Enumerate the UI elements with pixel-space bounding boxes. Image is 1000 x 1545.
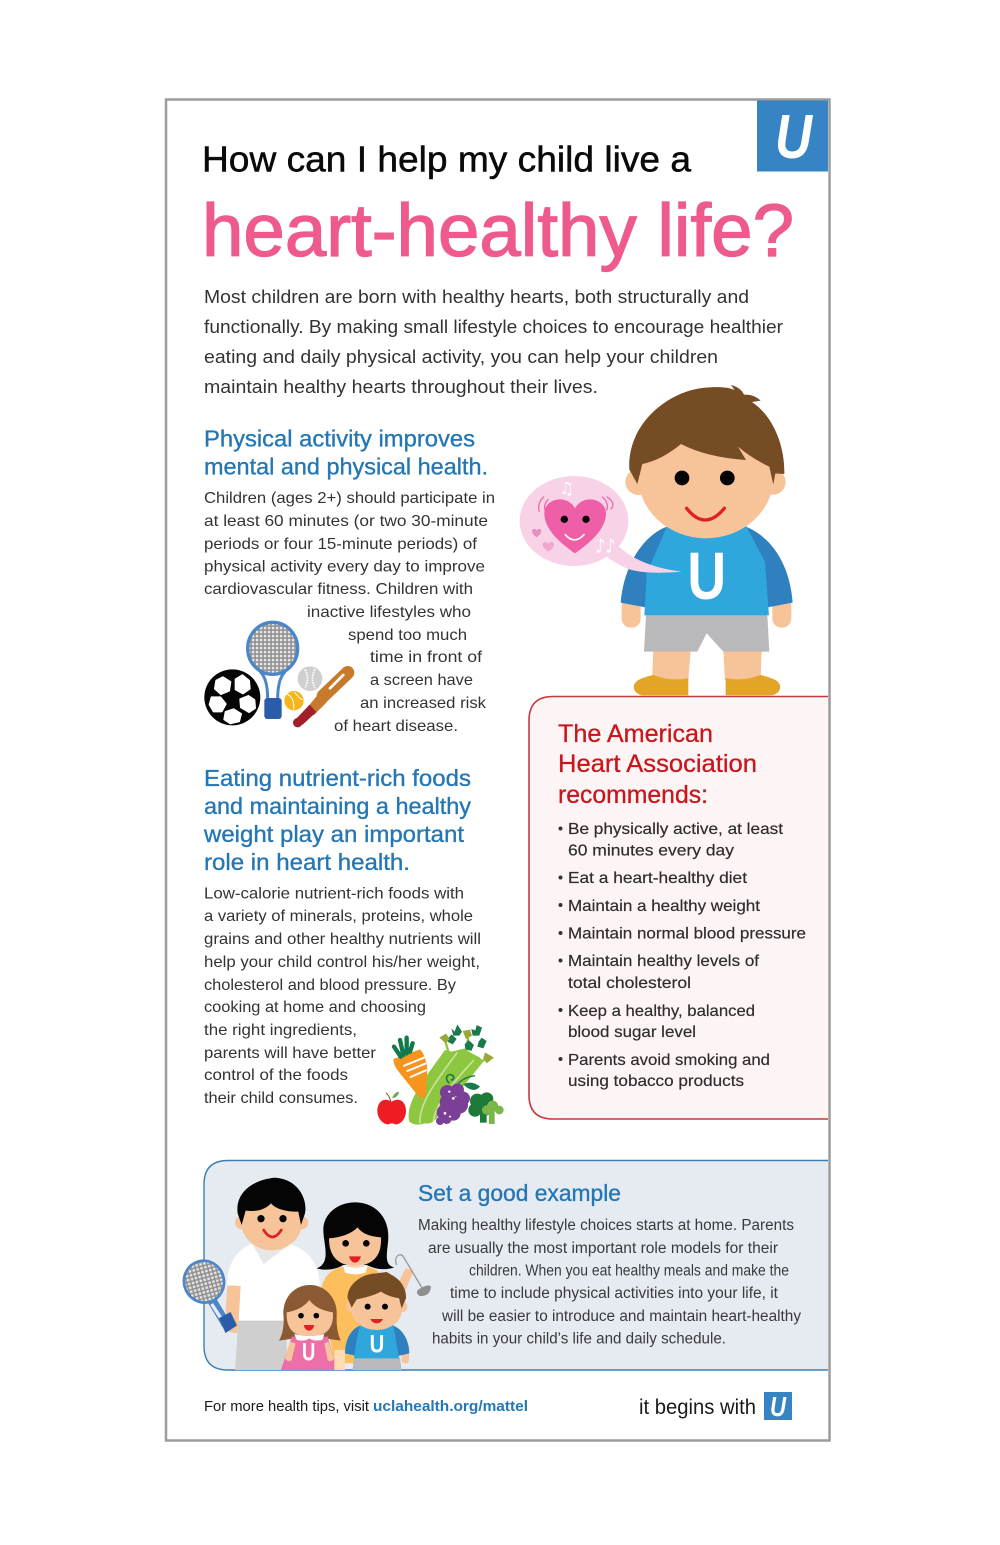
text block: set a good example: time to include physical activities into your life, it <box>450 1285 779 1302</box>
icon: music notes: ♪♪ <box>595 535 615 558</box>
text block: set a good example: habits in your child’s life and daily schedule. <box>432 1330 726 1348</box>
heading: physical activity: Physical activity improves <box>204 426 475 452</box>
text block: nutrient-rich foods: their child consumes. <box>204 1090 358 1107</box>
heading: nutrient-rich foods: and maintaining a healthy <box>204 793 471 819</box>
text block: physical activity: spend too much <box>348 627 467 644</box>
text block: set a good example: are usually the most important role models for their <box>428 1240 778 1257</box>
list: recommendations: Maintain a healthy weight <box>568 898 761 915</box>
list: recommendations: using tobacco products <box>568 1073 744 1090</box>
son: U <box>370 1331 384 1359</box>
list: recommendations: Eat a heart-healthy diet <box>568 870 748 887</box>
list: recommendations: total cholesterol <box>568 975 691 992</box>
heading: recommendations: The American <box>558 720 713 748</box>
speech bubble with heart <box>520 476 682 573</box>
mother <box>317 1202 431 1363</box>
panel: set a good example <box>204 1160 828 1370</box>
text block: nutrient-rich foods: the right ingredients, <box>204 1022 357 1039</box>
text block: physical activity: inactive lifestyles who <box>307 604 471 621</box>
list: recommendations: Maintain normal blood pressure <box>568 926 806 942</box>
footer tagline logo <box>639 1391 792 1422</box>
icon: fruits and vegetables <box>377 1024 504 1125</box>
illustration: boy with heart speech bubble <box>520 385 793 695</box>
heading: nutrient-rich foods: role in heart health. <box>204 849 410 875</box>
icon: broccoli <box>468 1092 504 1124</box>
title <box>202 138 794 272</box>
heading: set a good example: Set a good example <box>418 1180 621 1206</box>
icon: small hearts <box>532 529 554 552</box>
footer tagline logo: U <box>770 1391 787 1422</box>
boy: hands <box>622 597 791 628</box>
daughter <box>279 1285 341 1372</box>
text block: nutrient-rich foods: cooking at home and choosing <box>204 999 426 1016</box>
icon: music notes: ♫ <box>559 479 574 498</box>
icon: soccer ball <box>204 669 260 725</box>
text block: physical activity <box>204 490 495 735</box>
icon: tennis ball <box>284 691 304 710</box>
heading: nutrient-rich foods: weight play an important <box>203 821 465 847</box>
icon: apple <box>377 1092 406 1124</box>
boy: shorts <box>644 615 769 652</box>
intro paragraph: maintain healthy hearts throughout their lives. <box>204 376 598 397</box>
text block: set a good example: will be easier to introduce and maintain heart-healthy <box>441 1308 801 1325</box>
tennis racket <box>179 1256 236 1332</box>
icon: smiling heart <box>539 497 613 553</box>
text block: nutrient-rich foods: cholesterol and blood pressure. By <box>204 977 456 994</box>
heading: nutrient-rich foods <box>203 765 471 875</box>
title: heart-healthy life? <box>202 189 794 272</box>
icon: sports equipment <box>204 622 348 727</box>
text block: physical activity: Children (ages 2+) should participate in <box>204 490 495 507</box>
list: recommendations: blood sugar level <box>568 1024 696 1041</box>
list: recommendations: Keep a healthy, balanced <box>568 1003 755 1020</box>
text block: physical activity: of heart disease. <box>334 718 458 735</box>
text block: set a good example <box>418 1217 801 1348</box>
panel: American Heart Association recommendations <box>529 696 828 1119</box>
intro paragraph: eating and daily physical activity, you can help your children <box>204 346 718 367</box>
text block: nutrient-rich foods: control of the foods <box>204 1067 348 1084</box>
footer tagline logo: it begins with <box>639 1395 756 1419</box>
list: recommendations: Be physically active, at least <box>568 821 784 838</box>
icon: grapes <box>436 1075 480 1125</box>
text block: nutrient-rich foods: a variety of minerals, proteins, whole <box>204 908 473 925</box>
son <box>334 1272 409 1372</box>
heading: recommendations: recommends: <box>558 781 708 809</box>
page frame <box>166 100 830 1440</box>
icon: music notes <box>559 479 615 558</box>
footer link text: uclahealth.org/mattel <box>373 1399 528 1415</box>
icon: tennis racket <box>248 622 298 719</box>
heading: physical activity: mental and physical health. <box>204 454 488 480</box>
text block: physical activity: at least 60 minutes (or two 30-minute <box>204 513 488 530</box>
list: recommendations <box>558 821 806 1090</box>
father <box>226 1178 320 1372</box>
heading: recommendations <box>558 720 757 809</box>
text block: physical activity: physical activity every day to improve <box>204 558 485 576</box>
text block: nutrient-rich foods: grains and other healthy nutrients will <box>204 931 481 948</box>
intro paragraph: Most children are born with healthy hearts, both structurally and <box>204 286 749 307</box>
heading: recommendations: Heart Association <box>558 750 757 778</box>
daughter: U <box>302 1339 315 1367</box>
text block: nutrient-rich foods <box>204 886 481 1107</box>
icon: carrot <box>393 1038 427 1098</box>
boy: head <box>625 385 786 538</box>
text block: set a good example: Making healthy lifestyle choices starts at home. Parents <box>418 1217 794 1234</box>
text block: nutrient-rich foods: parents will have better <box>204 1045 377 1062</box>
icon: baseball <box>298 666 322 691</box>
boy: shirt: U <box>687 540 726 614</box>
boy: shirt <box>621 526 793 615</box>
text block: set a good example: children. When you eat healthy meals and make the <box>469 1262 789 1280</box>
icon: baseball bat <box>293 673 348 727</box>
text block: physical activity: a screen have <box>370 672 473 689</box>
text block: nutrient-rich foods: help your child control his/her weight, <box>204 954 480 971</box>
text block: nutrient-rich foods: Low-calorie nutrient-rich foods with <box>204 886 464 902</box>
illustration: family <box>179 1178 431 1372</box>
logo: U badge <box>757 100 828 172</box>
text block: physical activity: periods or four 15-minute periods) of <box>204 536 478 553</box>
intro paragraph: functionally. By making small lifestyle choices to encourage healthier <box>204 316 783 337</box>
list: recommendations: Parents avoid smoking and <box>568 1052 770 1069</box>
text block: physical activity: time in front of <box>370 649 483 666</box>
text block: physical activity: an increased risk <box>360 695 487 712</box>
icon: celery <box>409 1024 494 1125</box>
heading: nutrient-rich foods: Eating nutrient-rich foods <box>204 765 471 791</box>
text block: physical activity: cardiovascular fitness. Children with <box>204 581 473 598</box>
footer link text: For more health tips, visit <box>204 1399 369 1415</box>
list: recommendations: Maintain healthy levels of <box>568 953 760 970</box>
title: How can I help my child live a <box>202 138 692 180</box>
logo: U badge: U <box>775 103 814 172</box>
boy: legs and shoes <box>634 650 780 695</box>
list: recommendations: 60 minutes every day <box>568 842 734 860</box>
heading: physical activity <box>204 426 488 480</box>
intro paragraph <box>204 286 783 397</box>
footer link text <box>204 1399 528 1415</box>
